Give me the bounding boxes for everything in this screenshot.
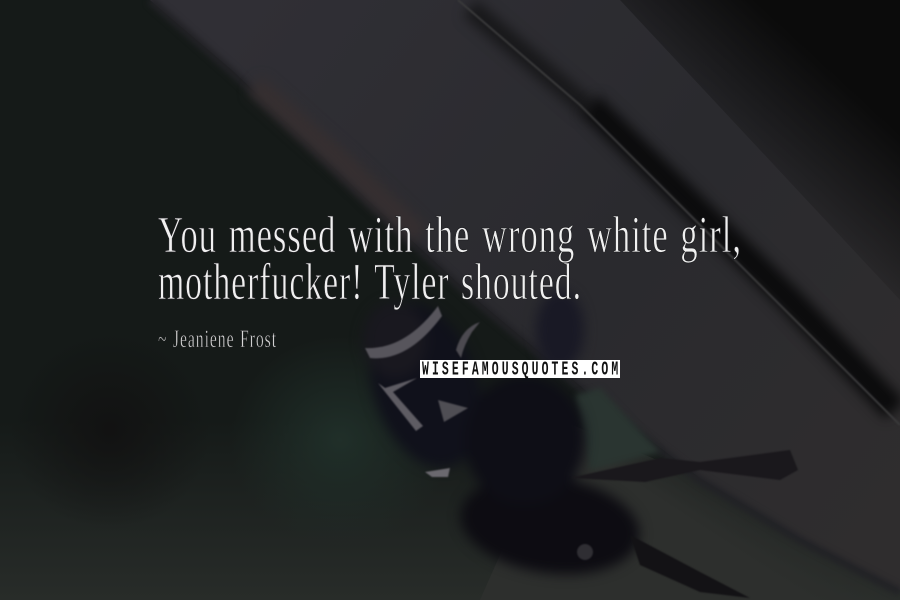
- background: dark left patch: [10, 330, 210, 530]
- background: top-right dark corner: [620, 0, 900, 300]
- background: lower right grey area: [480, 420, 900, 600]
- watermark text: WISEFAMOUSQUOTES.COM: [422, 359, 618, 381]
- background: green moss glow: [230, 335, 450, 545]
- wasp leg: [570, 450, 798, 482]
- author attribution: ~ Jeaniene Frost: [158, 326, 277, 353]
- background: brown tint along beam edge: [255, 85, 420, 235]
- quote line 2: motherfucker! Tyler shouted.: [158, 254, 582, 311]
- wasp pale markings: [365, 306, 593, 560]
- quote text: [158, 207, 742, 311]
- background: groove on the beam: [458, 0, 900, 425]
- wasp rear leg: [630, 535, 750, 598]
- background: green foliage floor: [0, 420, 900, 600]
- background: pale green patch behind leg: [575, 388, 660, 470]
- background: wasp insect silhouette: [349, 288, 798, 598]
- watermark badge: [420, 359, 620, 381]
